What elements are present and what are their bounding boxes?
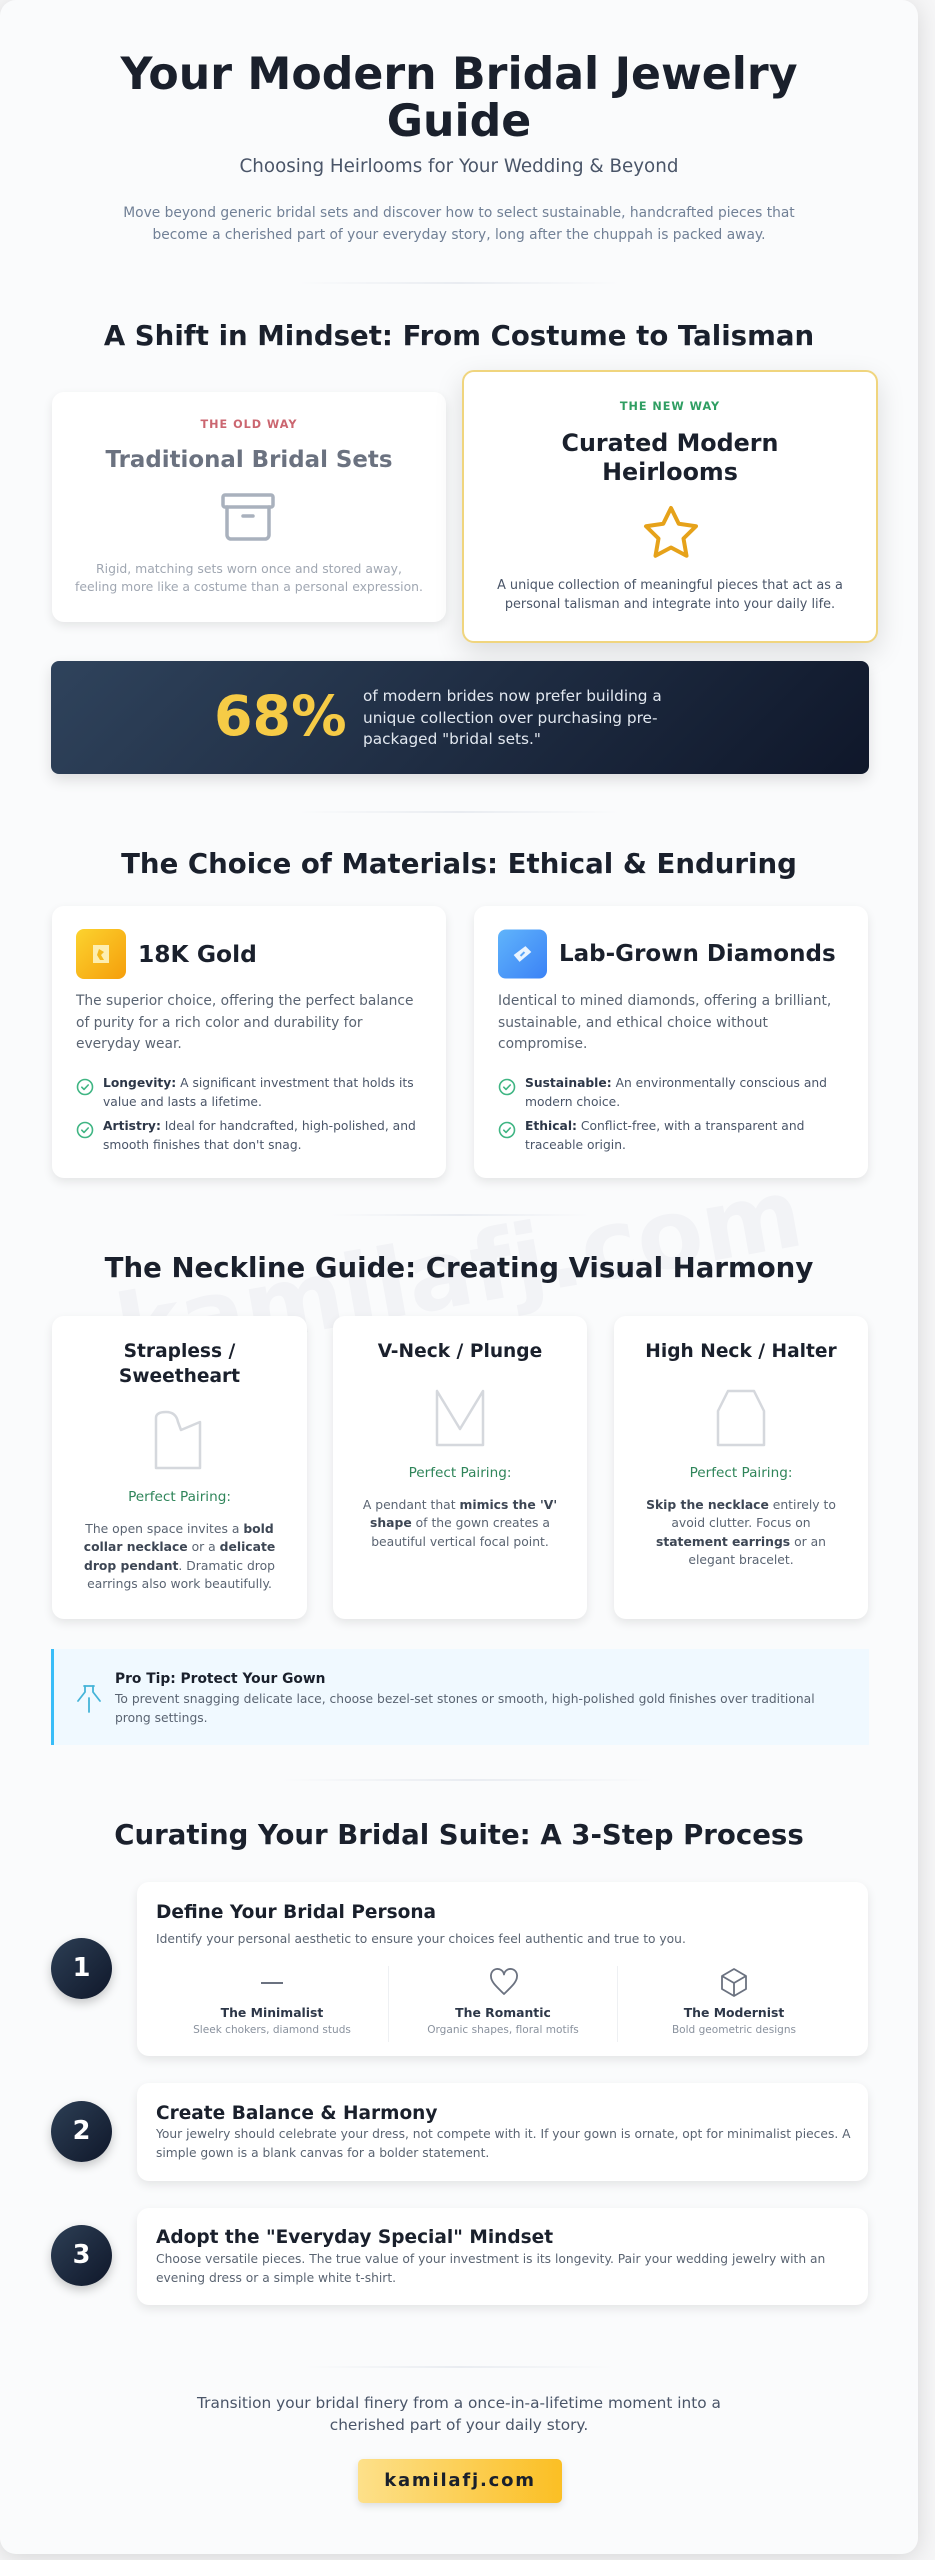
card text: A unique collection of meaningful pieces that act as a [497,578,843,593]
panel: old way [52,392,446,622]
icon: v neckline [436,1390,484,1446]
pairing text: The open space invites a bold [85,1522,274,1536]
card text [75,561,423,594]
stat text: packaged "bridal sets." [363,730,541,748]
pairing label: Perfect Pairing: [409,1465,511,1481]
item text: Artistry: Ideal for handcrafted, high-polished, and [103,1119,416,1133]
icon: check [76,1122,94,1138]
item text: smooth finishes that don't snag. [103,1138,302,1152]
persona: modernist [672,1968,796,2036]
intro text: Move beyond generic bridal sets and discover how to select sustainable, handcrafted pieces that [123,205,795,221]
icon: dash [261,1982,283,1984]
step number 3 [51,2225,112,2286]
persona: romantic [388,1966,618,2042]
step text: Your jewelry should celebrate your dress, not compete with it. If your gown is ornate, opt for minimalist pieces. A [156,2127,851,2141]
title: Your Modern Bridal Jewelry [120,49,798,100]
card title: V-Neck / Plunge [378,1341,542,1362]
panel: v-neck [333,1316,587,1619]
heading: steps: Curating Your Bridal Suite: A 3-Step Process [114,1818,804,1851]
pairing text: elegant bracelet. [688,1553,794,1567]
pairing text: Skip the necklace entirely to [646,1498,836,1512]
panel: new way [462,370,878,643]
step title: Adopt the "Everyday Special" Mindset [156,2227,553,2248]
card title: High Neck / Halter [645,1341,837,1362]
step text [156,2252,825,2284]
subtitle: Choosing Heirlooms for Your Wedding & Beyond [240,156,678,177]
closing text: Transition your bridal finery from a once-in-a-lifetime moment into a [197,2394,721,2412]
stat text: unique collection over purchasing pre- [363,709,657,727]
icon: check [76,1078,94,1096]
intro text: become a cherished part of your everyday story, long after the chuppah is packed away. [152,227,765,243]
pairing text [646,1498,836,1567]
card title: 18K Gold [138,940,257,968]
label: the new way: THE NEW WAY [620,400,720,413]
intro text [123,205,795,243]
item text [525,1076,827,1108]
panel: high neck [614,1316,868,1619]
card title: Traditional Bridal Sets [106,447,392,473]
step text: Identify your personal aesthetic to ensure your choices feel authentic and true to you. [156,1932,686,1946]
step text: evening dress or a simple white t-shirt. [156,2270,396,2284]
button: website: kamilafj.com [384,2470,536,2491]
pairing label: Perfect Pairing: [690,1465,792,1481]
step text [156,2127,851,2160]
closing text [0,2392,918,2436]
item text: Ethical: Conflict-free, with a transparent and [525,1119,804,1133]
heading: materials: The Choice of Materials: Ethical & Enduring [121,847,797,880]
pairing text: earrings also work beautifully. [87,1577,272,1591]
heading: neckline: The Neckline Guide: Creating Visual Harmony [105,1251,813,1284]
card title: Curated Modern [562,429,778,457]
persona detail: Sleek chokers, diamond studs [193,2024,351,2036]
persona name: The Romantic [455,2005,551,2020]
item text: Sustainable: An environmentally conscious and [525,1076,827,1090]
pairing text: shape of the gown creates a [370,1516,550,1530]
panel: lab-grown diamonds [474,906,868,1178]
tip text: To prevent snagging delicate lace, choose bezel-set stones or smooth, high-polished gold finishes over traditional [115,1692,815,1706]
step number 2: 2 [73,2116,90,2146]
persona: minimalist [193,1982,351,2036]
card text [497,578,843,612]
pairing text: avoid clutter. Focus on [671,1516,811,1530]
step title: Create Balance & Harmony [156,2103,437,2124]
list item: sustainable [498,1076,827,1108]
closing text: cherished part of your daily story. [330,2416,588,2434]
card text: sustainable, and ethical choice without [498,1014,768,1030]
item text [103,1076,414,1108]
icon: heart [490,1968,518,1995]
list item: artistry [76,1119,416,1152]
step title: Define Your Bridal Persona [156,1902,436,1923]
card title: Strapless / [124,1341,235,1362]
card text [498,993,831,1052]
step number 1 [51,1938,112,1999]
icon: archive box [221,493,275,541]
panel: step 1 [137,1882,868,2056]
persona detail: Bold geometric designs [672,2024,796,2036]
pairing text [84,1522,275,1591]
card text: feeling more like a costume than a personal expression. [75,579,423,594]
item text: value and lasts a lifetime. [103,1094,262,1108]
pairing label: Perfect Pairing: [128,1489,231,1505]
pairing text: drop pendant. Dramatic drop [84,1559,275,1573]
callout: pro tip [51,1649,869,1745]
card text: everyday wear. [76,1036,182,1052]
panel: step 3 [137,2208,868,2305]
card text: The superior choice, offering the perfect balance [76,993,414,1009]
watermark: kamilafj.com [108,1157,810,1387]
pairing text: A pendant that mimics the 'V' [363,1498,557,1512]
icon: check [498,1122,516,1138]
item text: modern choice. [525,1094,620,1108]
button: website [358,2459,562,2503]
item text [525,1119,804,1152]
persona name: The Modernist [684,2005,784,2020]
step number 1: 1 [73,1953,90,1983]
icon: cube [721,1968,747,1997]
persona name: The Minimalist [221,2005,323,2020]
card title: Lab-Grown Diamonds [559,941,836,967]
tip title: Pro Tip: Protect Your Gown [115,1671,325,1687]
card text [76,993,414,1052]
list item: longevity [76,1076,414,1108]
step text: Choose versatile pieces. The true value of your investment is its longevity. Pair your wedding jewelry with an [156,2252,825,2266]
stat text [363,687,662,748]
card text: Identical to mined diamonds, offering a brilliant, [498,993,831,1009]
icon: diamond [498,930,547,978]
step text: simple gown is a blank canvas for a bolder statement. [156,2146,489,2160]
icon: check [498,1078,516,1096]
item text: Longevity: A significant investment that holds its [103,1076,414,1090]
card text: personal talisman and integrate into your daily life. [505,597,835,612]
list item: ethical [498,1119,804,1152]
panel: 18K gold [52,906,446,1178]
heading: mindset: A Shift in Mindset: From Costume to Talisman [104,319,814,352]
card text: compromise. [498,1036,587,1052]
stat number: 68% [214,685,347,749]
tip text [114,1692,815,1724]
icon: prong [77,1685,101,1713]
item text: traceable origin. [525,1138,626,1152]
step number 2 [51,2101,112,2162]
pairing text: beautiful vertical focal point. [371,1535,549,1549]
title: Guide [387,96,531,147]
pairing text [363,1498,557,1549]
card title: Sweetheart [119,1366,240,1386]
panel: step 2 [137,2083,868,2181]
title [120,49,798,147]
icon: sweetheart neckline [154,1410,202,1470]
icon: gold [76,929,126,979]
card title: Heirlooms [602,458,738,486]
pairing text: statement earrings or an [656,1535,826,1549]
stat text: of modern brides now prefer building a [363,687,662,705]
label: the old way: THE OLD WAY [201,418,297,431]
icon: high neckline [716,1390,766,1446]
card text: Rigid, matching sets worn once and stored away, [96,561,402,576]
item text [103,1119,416,1152]
card title [562,429,778,486]
tip text: prong settings. [115,1710,208,1724]
step number 3: 3 [73,2240,90,2270]
card text: of purity for a rich color and durability for [76,1014,363,1030]
icon: star [644,506,698,558]
panel: strapless [52,1316,307,1619]
persona detail: Organic shapes, floral motifs [427,2024,579,2036]
pairing text: collar necklace or a delicate [84,1540,275,1554]
card title [119,1341,240,1386]
stat banner [51,661,869,774]
